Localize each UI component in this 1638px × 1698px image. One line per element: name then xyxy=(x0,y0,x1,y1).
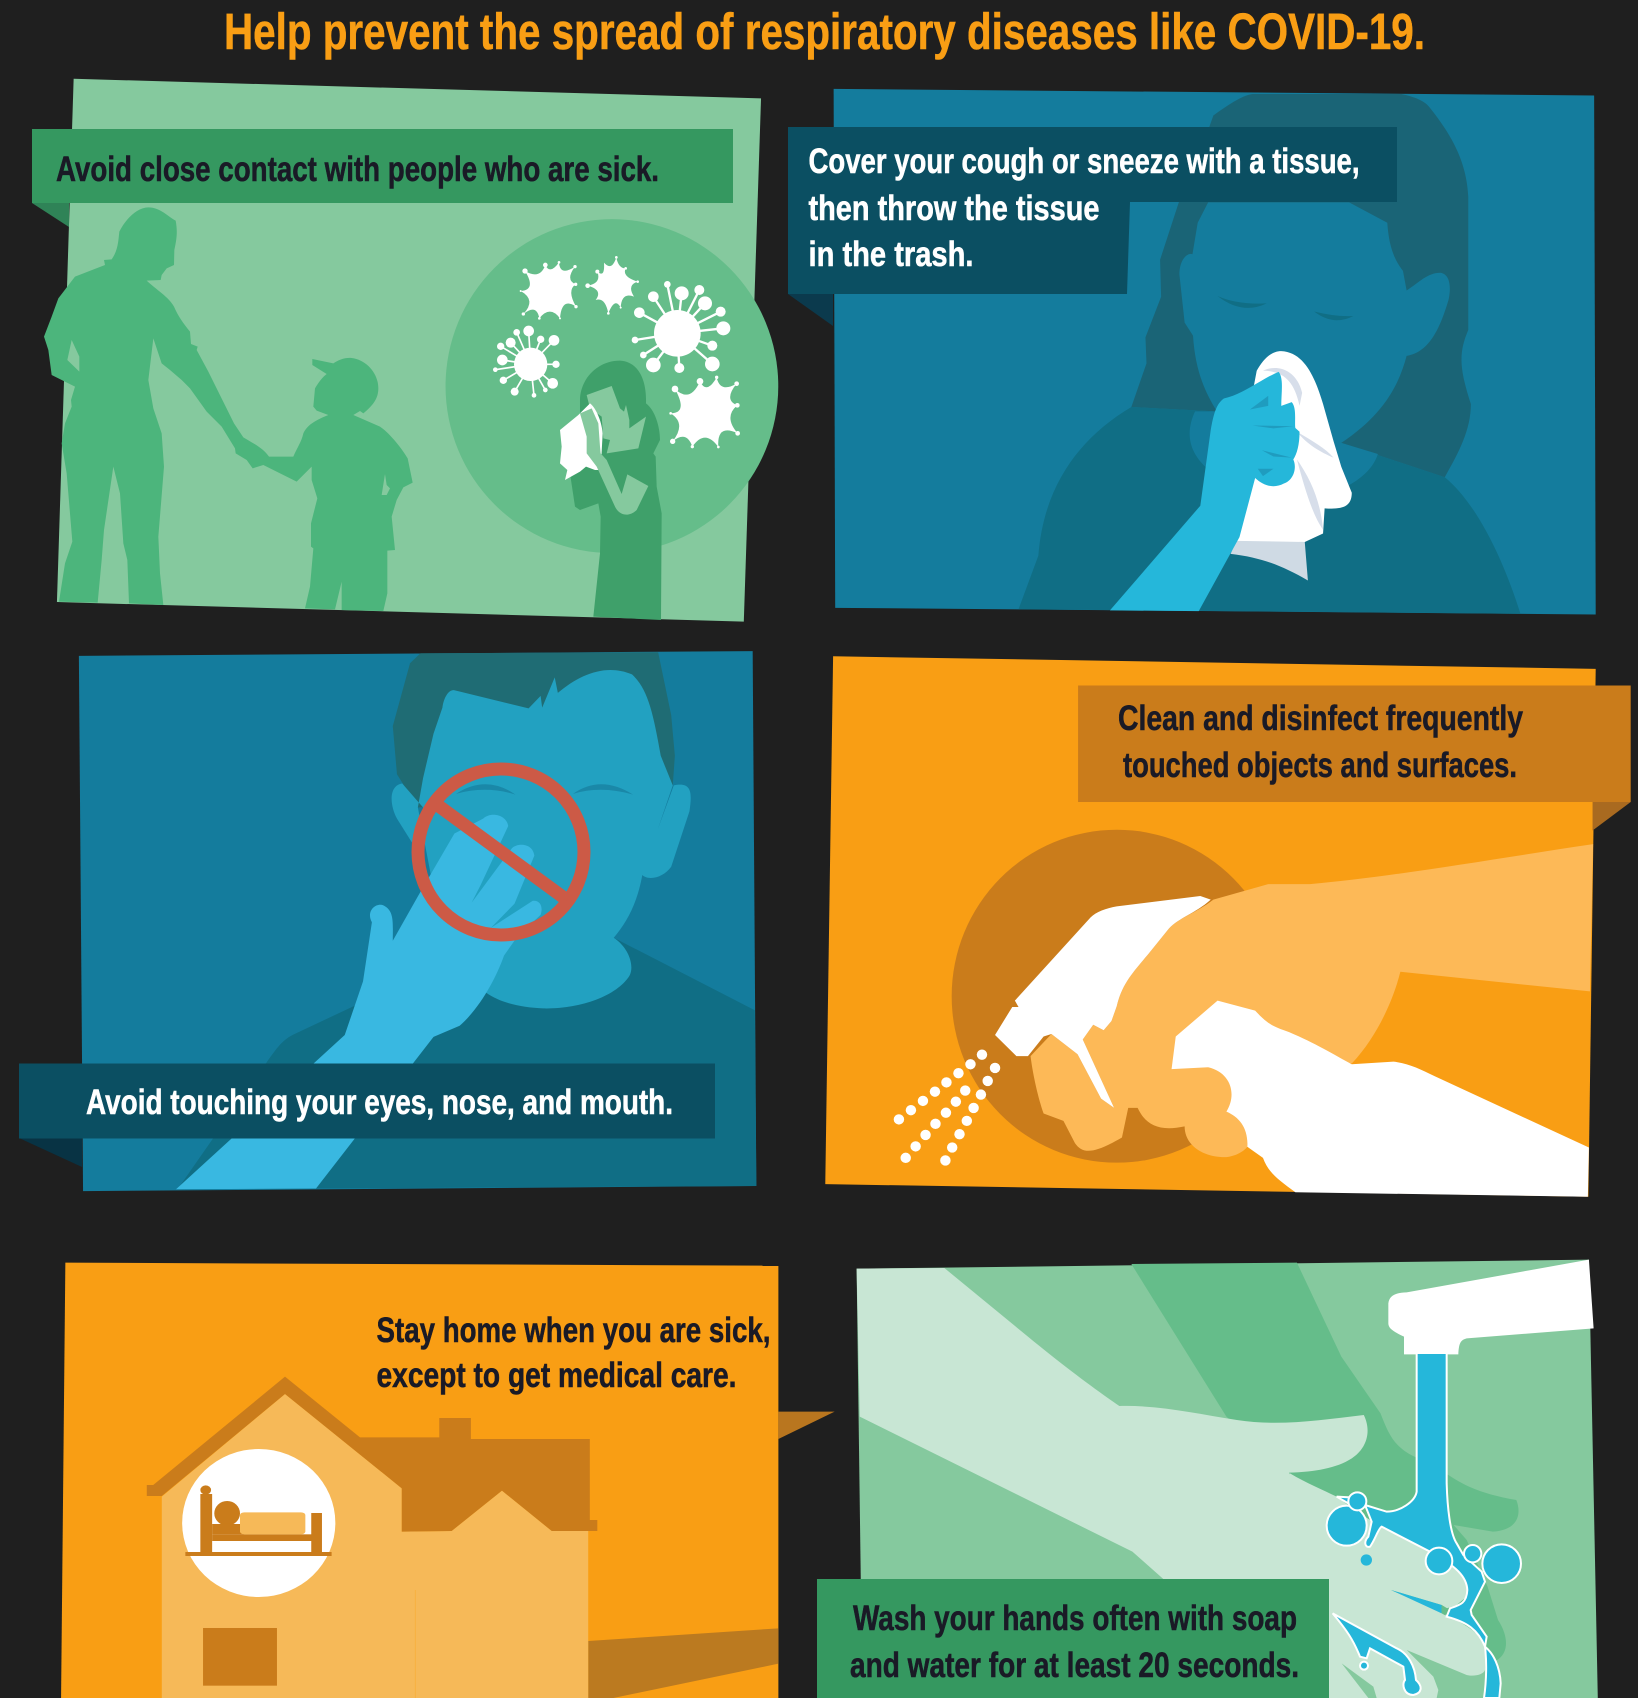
panel: wash hands xyxy=(817,1260,1598,1698)
ribbon: cover cough: then throw the tissue xyxy=(808,189,1100,228)
text: stay home: except to get medical care. xyxy=(376,1356,736,1395)
illustration: faucet spout collar xyxy=(1404,1300,1458,1354)
illustration: closed eyes xyxy=(1218,296,1353,320)
text: clean and disinfect: touched objects and surfaces. xyxy=(1123,746,1517,785)
illustration: faucet xyxy=(1388,1260,1594,1354)
ribbon: cover cough xyxy=(788,127,1397,326)
ribbon: close contact: Avoid close contact with people who are sick. xyxy=(56,150,659,189)
ribbon: wash hands: Wash your hands often with soap xyxy=(853,1599,1297,1638)
illustration: spray bottle body xyxy=(1172,1001,1589,1197)
text: clean and disinfect xyxy=(1118,699,1523,785)
illustration: face xyxy=(1179,202,1450,489)
illustration: window with bed xyxy=(182,1449,335,1597)
illustration: hair xyxy=(393,652,675,808)
illustration: door xyxy=(203,1628,277,1686)
illustration: shoulders xyxy=(178,938,756,1189)
illustration: infection circle xyxy=(446,219,778,553)
panel: stay home xyxy=(61,1263,835,1698)
illustration: body xyxy=(1019,407,1520,614)
silhouettes: mother and child holding hands xyxy=(44,207,413,611)
illustration: backdrop circle xyxy=(952,830,1282,1163)
icon: virus particles xyxy=(493,256,740,448)
ribbon: wash hands xyxy=(817,1579,1329,1698)
ribbon: fold xyxy=(1593,802,1631,830)
illustration: spray bottle head xyxy=(995,896,1211,1108)
illustration: eyebrows xyxy=(456,784,633,795)
ribbon: band xyxy=(1078,685,1631,802)
illustration: pale hand fingers and water xyxy=(1290,1338,1521,1698)
ribbon: cover cough: in the trash. xyxy=(808,235,974,274)
illustration: ground shadow xyxy=(588,1628,778,1698)
panel: avoid close contact xyxy=(32,79,778,622)
ribbon: avoid touching: Avoid touching your eyes, nose, and mouth. xyxy=(86,1083,673,1122)
text: stay home xyxy=(376,1311,770,1395)
illustration: tissue xyxy=(1231,351,1352,580)
ribbon: cover cough: Cover your cough or sneeze with a tissue, xyxy=(808,142,1360,181)
illustration: sick woman xyxy=(560,361,662,620)
illustration: hand xyxy=(1031,844,1593,1157)
illustration: roof xyxy=(147,1377,597,1532)
ribbon: wash hands: and water for at least 20 seconds. xyxy=(850,1646,1299,1685)
panel: clean and disinfect xyxy=(825,656,1631,1197)
panel: avoid touching face xyxy=(19,651,756,1191)
text: clean and disinfect: Clean and disinfect frequently xyxy=(1118,699,1523,738)
illustration: house walls xyxy=(162,1394,588,1698)
icon: prohibition sign xyxy=(418,769,584,935)
illustration: running water xyxy=(1327,1338,1521,1698)
illustration: dark arm band xyxy=(1131,1263,1519,1663)
text: stay home: Stay home when you are sick, xyxy=(376,1311,770,1350)
illustration: hand xyxy=(1110,372,1300,611)
ribbon: avoid touching xyxy=(19,1064,715,1167)
panel: cover cough xyxy=(788,89,1596,614)
illustration: pale hand upper xyxy=(857,1268,1368,1698)
illustration: hand xyxy=(176,815,542,1189)
illustration: spray droplets xyxy=(894,1049,1000,1166)
illustration: hair xyxy=(1131,94,1471,477)
ribbon: close contact xyxy=(32,129,733,227)
ribbon fold xyxy=(778,1412,835,1439)
illustration: face and ears xyxy=(392,670,691,1008)
